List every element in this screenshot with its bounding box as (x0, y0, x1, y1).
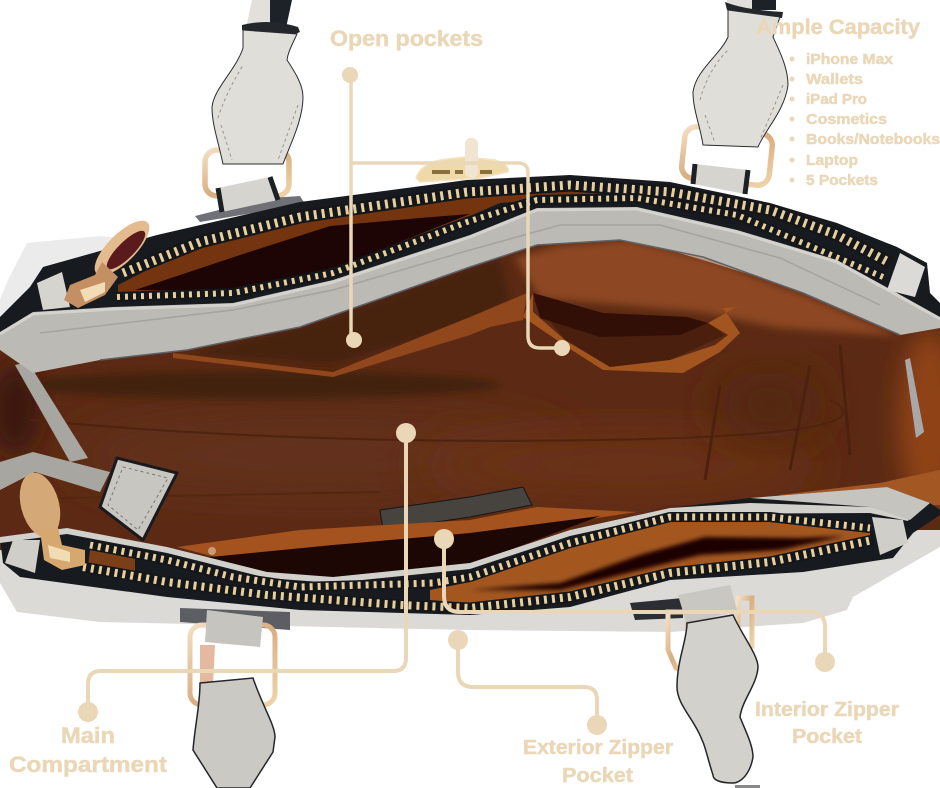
label: main compartment: Main (61, 723, 115, 748)
callout: open pockets (330, 26, 570, 356)
bag interior (0, 235, 940, 590)
zipper end tab: lower left (5, 540, 40, 573)
strap: left interior (0, 362, 177, 540)
handle: top left (195, 0, 305, 222)
label: exterior zipper pocket: Exterior Zipper (523, 737, 673, 759)
upper zipper panel (0, 175, 940, 373)
gray flap: upper (0, 207, 940, 373)
tag: brand label (380, 487, 532, 530)
ample capacity heading: Ample Capacity (756, 16, 920, 39)
zipper end tab: upper left (37, 272, 70, 310)
ample capacity list: iPhone Max (806, 51, 894, 68)
label: interior zipper pocket: Pocket (792, 726, 862, 748)
ample capacity list: Laptop (806, 152, 858, 169)
zipper: upper inner (117, 198, 883, 297)
open pockets (173, 293, 750, 377)
ample capacity list: Books/Notebooks (806, 131, 940, 148)
ample capacity list: Cosmetics (806, 111, 887, 128)
zipper end tab: upper right (887, 253, 925, 297)
zipper pull: upper left (64, 213, 157, 308)
ample capacity list (790, 51, 940, 189)
label: interior zipper pocket: Interior Zipper (755, 699, 899, 721)
lower zip pocket binding (177, 507, 637, 578)
callout: exterior zipper pocket (448, 630, 673, 787)
label: open pockets: Open pockets (330, 26, 483, 51)
bag side wings (0, 236, 940, 632)
lower zipper panel (0, 487, 940, 615)
handle: top right (681, 0, 788, 194)
zipper: lower lower (83, 540, 873, 608)
handle: bottom right (630, 585, 760, 788)
ample capacity list: 5 Pockets (806, 172, 878, 189)
label: main compartment: Compartment (9, 752, 168, 777)
zipper: lower upper (90, 517, 870, 587)
clasp (416, 138, 508, 182)
ample capacity list: iPad Pro (806, 91, 867, 108)
zipper: upper outer (123, 185, 890, 273)
zipper pull: lower left (13, 468, 85, 570)
zipper end tab: lower right (872, 517, 908, 555)
label: exterior zipper pocket: Pocket (562, 765, 633, 787)
handle: bottom left (180, 608, 290, 788)
callout: main compartment (9, 423, 416, 777)
strap: right interior band (905, 358, 924, 438)
callout: interior zipper pocket (434, 529, 899, 748)
gray lip: lower (0, 503, 910, 583)
ample capacity list: Wallets (806, 71, 863, 88)
